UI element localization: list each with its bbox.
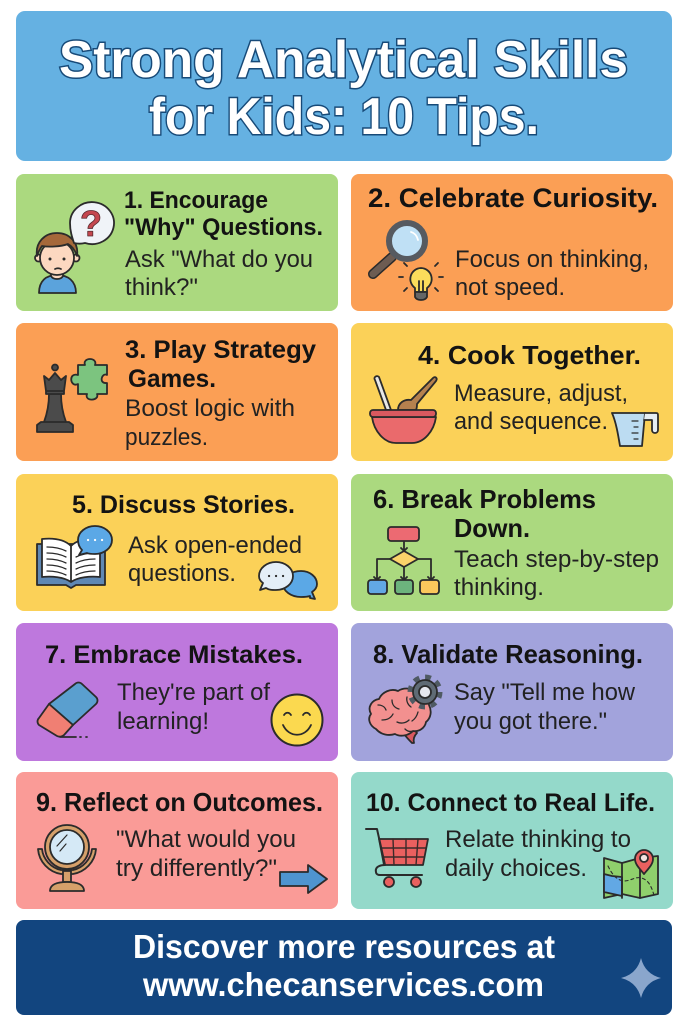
footer text: Discover more resources at <box>133 928 555 965</box>
text: tip 10: daily choices. <box>445 855 587 882</box>
text: tip 1: think?" <box>125 274 198 301</box>
panel: title banner <box>16 11 672 161</box>
heading: tip 3: Games. <box>128 365 216 393</box>
heading: tip 3 <box>125 336 316 393</box>
icon: child with question bubble <box>35 202 114 293</box>
title: Strong Analytical Skills <box>59 31 628 89</box>
text: tip 9: try differently?" <box>116 855 277 882</box>
icon: mixing bowl <box>370 376 437 443</box>
heading: tip 6: 6. Break Problems <box>373 484 596 514</box>
text: tip 1: Ask "What do you <box>125 246 313 273</box>
text: tip 6: Teach step-by-step <box>454 546 659 573</box>
text: tip 6: thinking. <box>454 574 544 601</box>
icon: flowchart <box>368 527 439 594</box>
icon: shopping cart <box>366 829 428 887</box>
text: tip 4: and sequence. <box>454 408 608 435</box>
text: tip 6 <box>454 546 659 601</box>
text: tip 5: questions. <box>128 560 236 587</box>
text: tip 10: Relate thinking to <box>445 826 631 853</box>
text: tip 3 <box>125 395 295 451</box>
panel: tip 6 <box>16 474 673 1015</box>
arrow: try differently <box>280 865 327 893</box>
footer text: www.checanservices.com <box>142 966 544 1003</box>
icon: chess queen and puzzle piece <box>37 359 107 432</box>
panel: tip 8 <box>16 623 673 1015</box>
panel: tip 2 <box>16 174 673 1015</box>
heading: tip 10: 10. Connect to Real Life. <box>366 789 655 817</box>
panel: tip 9 <box>16 772 673 1015</box>
heading: tip 6 <box>373 484 596 543</box>
heading: tip 1 <box>124 187 323 241</box>
text: tip 1 <box>125 246 313 301</box>
footer text <box>133 928 555 1003</box>
icon: smiley face <box>272 694 322 746</box>
heading: tip 1: "Why" Questions. <box>124 214 323 241</box>
text: tip 7: They're part of <box>117 679 270 706</box>
text: tip 10 <box>445 826 631 882</box>
text: tip 8: you got there." <box>454 708 607 735</box>
panel: tip 1 <box>16 174 673 1015</box>
heading: tip 4: 4. Cook Together. <box>418 340 641 370</box>
panel: tip 7 <box>16 623 673 1015</box>
title: for Kids: 10 Tips. <box>149 88 539 146</box>
icon: mirror <box>38 825 96 891</box>
text: tip 2: not speed. <box>455 274 565 301</box>
icon: open book <box>37 526 112 588</box>
icon: measuring cup <box>612 413 658 446</box>
text: tip 3: Boost logic with <box>125 395 295 422</box>
panel: tip 3 <box>16 323 673 1015</box>
text: tip 4: Measure, adjust, <box>454 380 628 407</box>
text: tip 9: "What would you <box>116 826 296 853</box>
text: tip 7 <box>117 679 270 735</box>
panel: tip 5 <box>16 474 673 1015</box>
panel: footer <box>16 920 672 1015</box>
text: tip 7: learning! <box>117 708 209 735</box>
icon: magnifying glass and light bulb <box>373 223 443 300</box>
text: tip 5: Ask open-ended <box>128 532 302 559</box>
text: tip 5 <box>128 532 302 587</box>
heading: tip 5: 5. Discuss Stories. <box>72 491 295 519</box>
panel: tip 4 <box>16 323 673 1015</box>
heading: tip 6: Down. <box>454 513 530 543</box>
text: tip 8 <box>454 679 635 735</box>
icon: child with question bubble: ? <box>80 203 102 244</box>
icon: brain and gear <box>369 677 440 743</box>
text: tip 3: puzzles. <box>125 424 208 451</box>
text: tip 9 <box>116 826 296 882</box>
heading: tip 9: 9. Reflect on Outcomes. <box>36 787 323 817</box>
heading: tip 7: 7. Embrace Mistakes. <box>45 641 303 669</box>
heading: tip 3: 3. Play Strategy <box>125 336 316 364</box>
text: tip 2 <box>455 246 649 301</box>
text: tip 8: Say "Tell me how <box>454 679 635 706</box>
heading: tip 1: 1. Encourage <box>124 187 268 214</box>
text: tip 2: Focus on thinking, <box>455 246 649 273</box>
heading: tip 2: 2. Celebrate Curiosity. <box>368 183 658 213</box>
icon: map with pin <box>604 850 658 898</box>
icon: eraser <box>38 682 98 737</box>
icon: sparkle <box>621 958 661 998</box>
panel: tip 10 <box>16 772 673 1015</box>
text: tip 4 <box>454 380 628 435</box>
heading: tip 8: 8. Validate Reasoning. <box>373 639 643 669</box>
icon: two speech bubbles <box>259 562 317 599</box>
title <box>59 31 628 146</box>
